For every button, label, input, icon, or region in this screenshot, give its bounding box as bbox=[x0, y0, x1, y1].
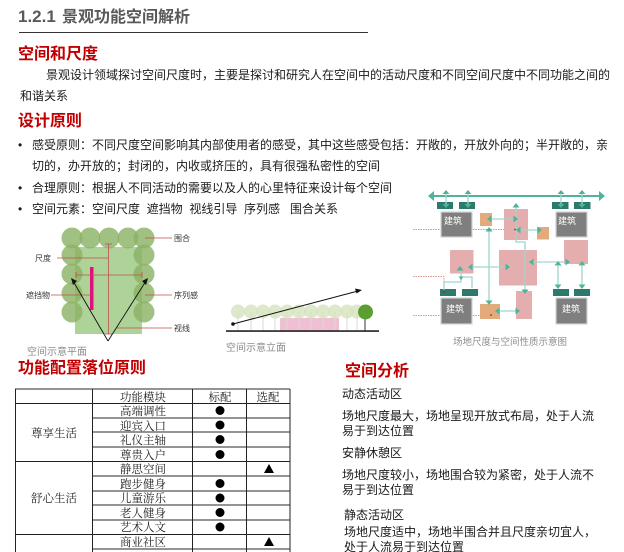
text block: quiet rest zone: 易于到达位置 bbox=[342, 482, 414, 497]
table: function modules: 艺术人文 bbox=[120, 520, 166, 534]
heading: function allocation principles: 功能配置落位原则 bbox=[18, 358, 146, 377]
text block: design principles list: • bbox=[18, 202, 22, 216]
chart: site scale and spatial quality diagram: 建筑 bbox=[446, 303, 464, 314]
title: 景观功能空间解析 bbox=[62, 7, 190, 26]
table: function modules: 跑步健身 bbox=[120, 477, 166, 491]
caption: elevation: 空间示意立面 bbox=[226, 341, 286, 354]
table: function modules: 高端调性 bbox=[120, 404, 166, 418]
chart: spatial plan diagram: 遮挡物 bbox=[26, 290, 50, 300]
text block: static activity zone: 场地尺度适中，场地半围合并且尺度亲切宜人， bbox=[344, 524, 596, 539]
text block: design principles list: 空间元素：空间尺度 遮挡物 视线引导 序列感 围合关系 bbox=[32, 201, 338, 216]
table: function modules: 舒心生活 bbox=[31, 491, 77, 505]
caption: plan: 空间示意平面 bbox=[27, 345, 87, 358]
table: function modules: 商业社区 bbox=[120, 535, 166, 549]
table: function modules: 尊贵入户 bbox=[120, 448, 166, 462]
table: function modules: 静思空间 bbox=[120, 462, 166, 476]
text block: design principles list bbox=[18, 137, 608, 216]
heading: space and scale: 空间和尺度 bbox=[18, 44, 98, 63]
table: function modules: 迎宾入口 bbox=[120, 419, 166, 433]
text block: dynamic activity zone: 场地尺度最大，场地呈现开放式布局，处于人流 bbox=[342, 408, 594, 423]
text block: quiet rest zone bbox=[342, 445, 594, 497]
table: function modules: 老人健身 bbox=[120, 506, 166, 520]
chart: spatial plan diagram: 视线 bbox=[174, 323, 190, 333]
text block: dynamic activity zone: 易于到达位置 bbox=[342, 423, 414, 438]
heading: design principles: 设计原则 bbox=[18, 112, 82, 130]
table: function modules: 选配 bbox=[256, 390, 280, 404]
text block: space and scale intro: 和谐关系 bbox=[20, 89, 68, 103]
caption: site diagram: 场地尺度与空间性质示意图 bbox=[453, 336, 567, 348]
text block: quiet rest zone: 场地尺度较小，场地围合较为紧密，处于人流不 bbox=[342, 467, 594, 482]
text block: space and scale intro: 景观设计领域探讨空间尺度时，主要是探讨和研究人在空间中的活动尺度和不同空间尺度中不同功能之间的 bbox=[46, 67, 610, 82]
text block: design principles list: 感受原则：不同尺度空间影响其内部使用者的感受，其中这些感受包括：开敞的，开放外向的；半开敞的，亲 bbox=[32, 137, 608, 152]
table: function modules: 标配 bbox=[208, 390, 232, 404]
text block: quiet rest zone: 安静休憩区 bbox=[342, 445, 402, 460]
text block: dynamic activity zone: 动态活动区 bbox=[342, 387, 402, 401]
chart: site scale and spatial quality diagram: 建筑 bbox=[444, 215, 462, 226]
table: function modules: 儿童游乐 bbox=[120, 491, 166, 505]
chart: site scale and spatial quality diagram bbox=[413, 190, 605, 324]
title bbox=[18, 7, 368, 32]
chart: spatial plan diagram: 围合 bbox=[174, 233, 190, 243]
table: function modules bbox=[15, 389, 290, 552]
chart: spatial plan diagram: 序列感 bbox=[174, 290, 198, 300]
text block: design principles list: • bbox=[18, 138, 22, 152]
text block: design principles list: 合理原则：根据人不同活动的需要以及人的心里特征来设计每个空间 bbox=[32, 180, 392, 195]
chart: site scale and spatial quality diagram: 建筑 bbox=[558, 215, 576, 226]
chart: spatial plan diagram bbox=[26, 228, 198, 341]
text block: design principles list: 切的，办开放的；封闭的，内收或挤压的，具有很强私密性的空间 bbox=[32, 158, 380, 173]
title: 1.2.1 bbox=[18, 7, 56, 26]
chart: spatial elevation diagram bbox=[226, 288, 379, 332]
text block: dynamic activity zone bbox=[342, 387, 594, 438]
heading: space analysis: 空间分析 bbox=[345, 361, 409, 380]
text block: design principles list: • bbox=[18, 181, 22, 195]
chart: site scale and spatial quality diagram: 建筑 bbox=[562, 303, 580, 314]
chart: spatial plan diagram: 尺度 bbox=[35, 253, 51, 263]
text block: static activity zone: 静态活动区 bbox=[344, 508, 404, 522]
table: function modules: 礼仪主轴 bbox=[120, 433, 166, 447]
table: function modules: 尊享生活 bbox=[31, 426, 77, 440]
text block: static activity zone bbox=[344, 508, 596, 552]
table: function modules: 功能模块 bbox=[120, 390, 166, 404]
text block: space and scale intro bbox=[20, 67, 610, 103]
